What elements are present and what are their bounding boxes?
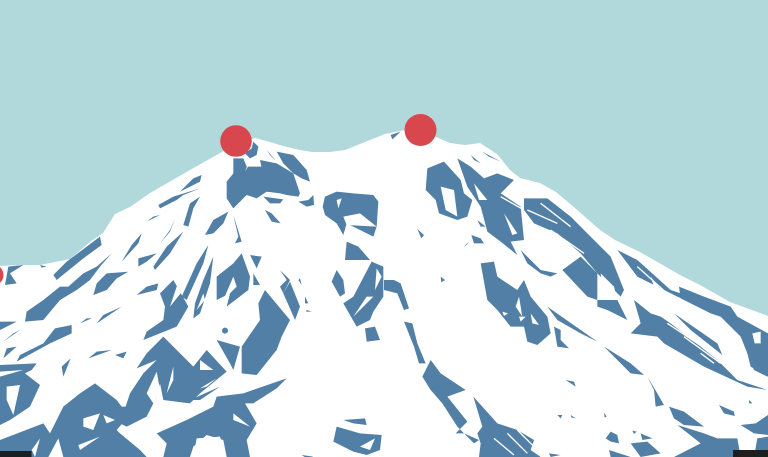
snow streaks in right rocks xyxy=(441,183,761,343)
rock shadows, left half xyxy=(0,142,383,457)
rock shadows, right half xyxy=(384,132,768,457)
dark corner: bottom right xyxy=(733,450,768,457)
red marker: left peak xyxy=(220,125,252,157)
red marker: left edge xyxy=(0,264,4,286)
mountain snow silhouette xyxy=(0,130,768,457)
red marker: right peak xyxy=(404,114,436,146)
snow patches in left rocks xyxy=(0,163,382,457)
dark corner: bottom left xyxy=(0,451,32,457)
